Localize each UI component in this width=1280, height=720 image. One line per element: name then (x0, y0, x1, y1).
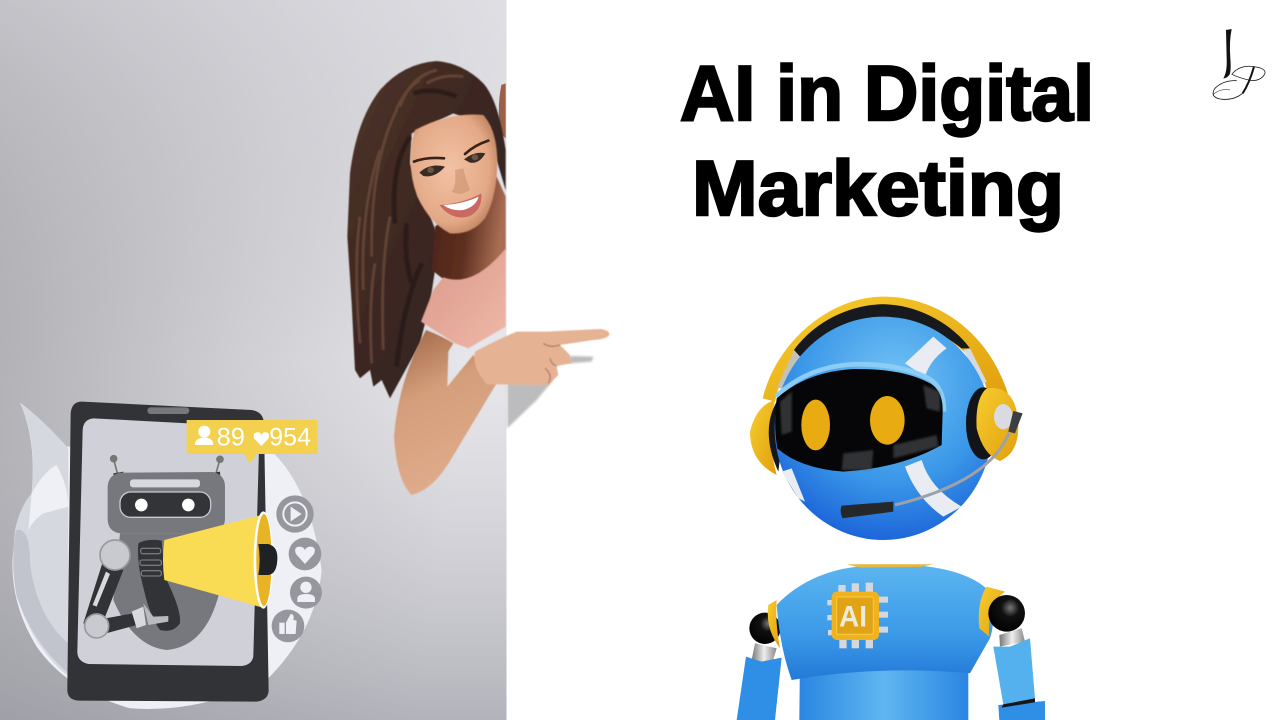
hand (474, 329, 609, 385)
headband (763, 297, 1008, 402)
white blob backdrop (12, 403, 322, 709)
phone speaker (147, 407, 189, 414)
visor (775, 369, 943, 472)
title: Marketing (692, 144, 1064, 232)
megaphone (163, 511, 277, 609)
stats badge: 89 (217, 423, 245, 451)
microphone boom (841, 411, 1023, 518)
icon: logo monogram (1213, 29, 1265, 99)
AI chip: AI (839, 600, 867, 633)
stats badge (187, 420, 317, 464)
top (421, 248, 506, 348)
visor reflections (780, 385, 940, 470)
icon: user button (290, 577, 322, 609)
icon: play button (276, 495, 314, 533)
right ear cup (966, 387, 1018, 461)
eyes (419, 153, 485, 176)
robot right arm (138, 540, 180, 631)
robot mascot (737, 297, 1045, 720)
icon: heart button (289, 538, 321, 570)
hair (347, 61, 506, 398)
robot antennas (111, 456, 223, 484)
phone body (67, 402, 269, 702)
robot eye band (120, 492, 211, 517)
title (680, 49, 1094, 232)
face (411, 114, 497, 233)
pointing hand shadow (507, 356, 593, 428)
robot left arm (83, 560, 123, 630)
smile (439, 193, 481, 217)
phone screen (77, 418, 259, 666)
arm (394, 330, 497, 495)
robot lower body (113, 533, 220, 650)
torso (799, 658, 968, 720)
illustration: phone with robot and megaphone (12, 402, 322, 709)
left upper arm (737, 613, 782, 720)
title: AI in Digital (680, 49, 1094, 137)
icon: thumbs up button (272, 610, 304, 642)
right upper arm (993, 628, 1045, 720)
photo: smiling woman pointing right (347, 61, 609, 495)
fingers on panel edge (499, 83, 506, 138)
neck (432, 177, 506, 282)
head white stripes (782, 337, 962, 517)
stats badge: 954 (269, 423, 311, 451)
visor rim (776, 364, 944, 412)
panel: grey gradient background (0, 0, 506, 720)
eyebrows (414, 141, 488, 162)
shoulder yellow rings (768, 587, 1025, 648)
robot eyes (801, 396, 905, 450)
robot illustration (83, 456, 225, 650)
robot head (108, 472, 225, 533)
left ear cup (750, 400, 783, 475)
nose (452, 168, 470, 194)
hair highlights (357, 70, 463, 367)
chest (777, 566, 993, 680)
head sphere (775, 317, 992, 540)
AI chip (827, 583, 888, 648)
